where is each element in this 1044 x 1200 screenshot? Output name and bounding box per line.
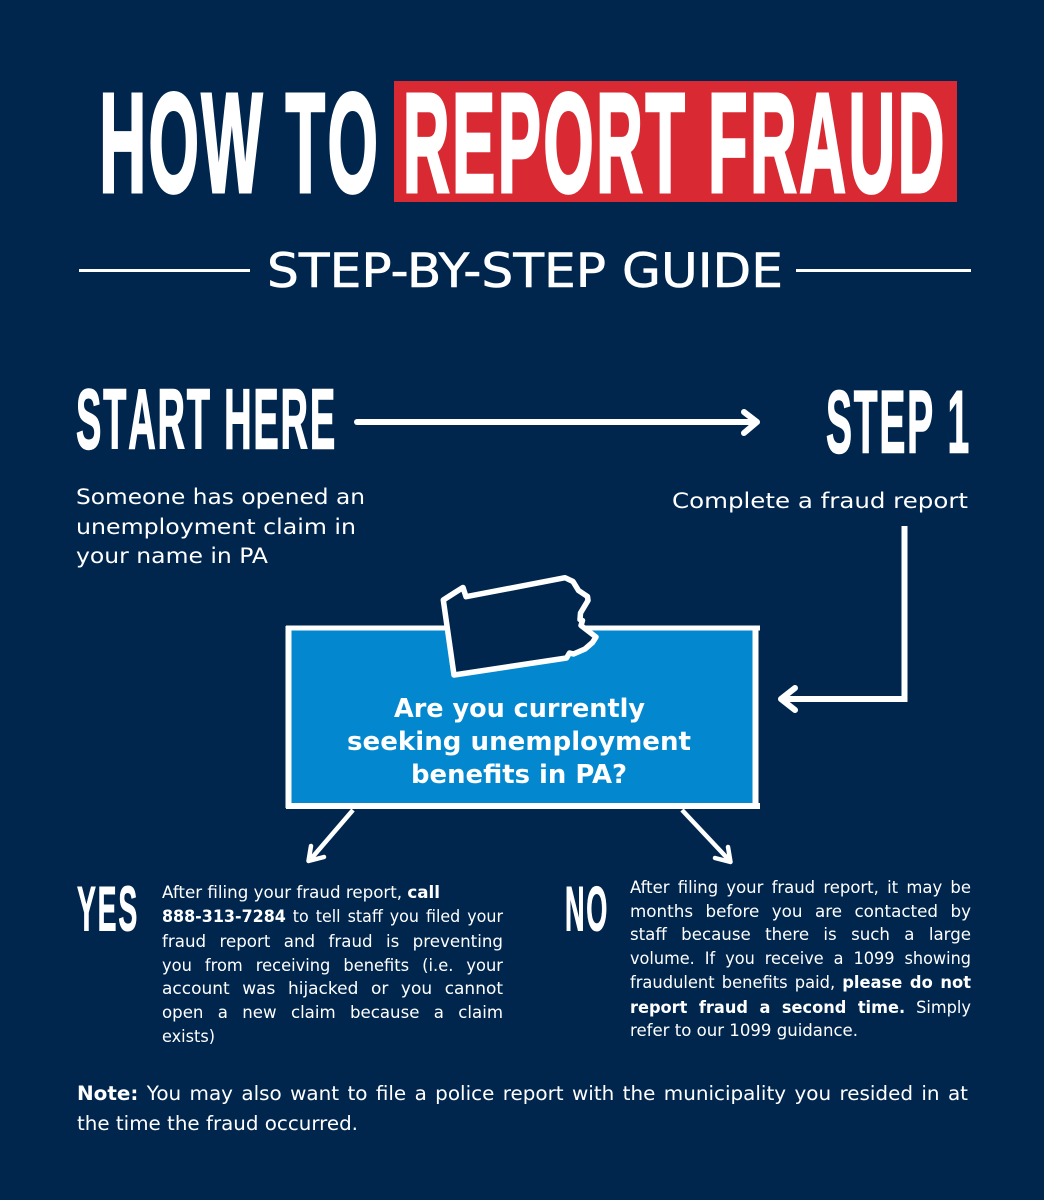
arrow: step 1 to question box bbox=[781, 526, 904, 710]
arrow: yes branch bbox=[308, 810, 353, 861]
yes explanation: account was hijacked or you cannot bbox=[162, 979, 504, 998]
no explanation: months before you are contacted by bbox=[630, 902, 971, 921]
yes explanation: fraud report and fraud is preventing bbox=[162, 932, 503, 951]
question text: benefits in PA? bbox=[411, 760, 627, 790]
arrow: start here to step 1 bbox=[357, 412, 757, 433]
yes explanation: open a new claim because a claim bbox=[162, 1003, 503, 1022]
no explanation: volume. If you receive a 1099 showing bbox=[630, 949, 971, 968]
yes explanation: exists) bbox=[162, 1027, 215, 1046]
question text bbox=[347, 694, 691, 790]
note: the time the fraud occurred. bbox=[77, 1112, 358, 1135]
icon: pennsylvania outline bbox=[443, 578, 596, 675]
question text: Are you currently bbox=[394, 694, 645, 724]
no explanation: refer to our 1099 guidance. bbox=[630, 1021, 858, 1040]
no explanation bbox=[630, 878, 971, 1040]
yes explanation: 888-313-7284 to tell staff you filed your bbox=[162, 907, 503, 926]
no explanation: staff because there is such a large bbox=[630, 925, 971, 944]
arrow: no branch bbox=[682, 810, 730, 862]
question text: seeking unemployment bbox=[347, 727, 691, 757]
note: Note: You may also want to file a police report with the municipality you resided in at bbox=[77, 1082, 968, 1105]
subtitle: step-by-step guide bbox=[79, 244, 971, 299]
start here description: your name in PA bbox=[76, 544, 268, 569]
question box bbox=[286, 578, 760, 809]
infographic canvas: START HERE bbox=[76, 372, 337, 468]
subtitle: step-by-step guide: STEP-BY-STEP GUIDE bbox=[267, 244, 783, 299]
start here description: Someone has opened an bbox=[76, 485, 365, 510]
title: HOW TO bbox=[100, 64, 380, 222]
yes explanation: After filing your fraud report, call bbox=[162, 883, 440, 902]
infographic canvas: YES bbox=[77, 874, 139, 944]
no explanation: After filing your fraud report, it may be bbox=[630, 878, 971, 897]
start here description: unemployment claim in bbox=[76, 515, 356, 540]
step 1 description: Complete a fraud report bbox=[672, 489, 968, 514]
no explanation: fraudulent benefits paid, please do not bbox=[630, 973, 971, 992]
yes explanation: you from receiving benefits (i.e. your bbox=[162, 956, 503, 975]
no explanation: report fraud a second time. Simply bbox=[630, 998, 971, 1017]
start here description bbox=[76, 485, 365, 569]
yes explanation bbox=[162, 883, 504, 1046]
note bbox=[77, 1082, 968, 1135]
infographic canvas: NO bbox=[565, 874, 609, 944]
